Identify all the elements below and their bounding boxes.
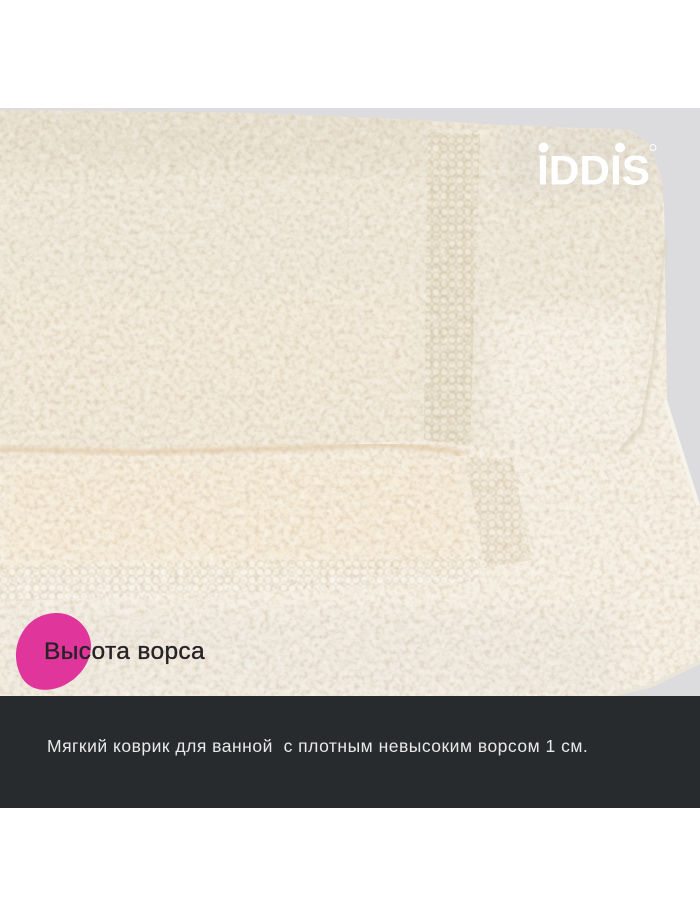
mat edge shadow (0, 445, 462, 455)
lower mat layer (0, 190, 700, 700)
upper rolled mat layer (0, 100, 700, 455)
photo background (0, 108, 700, 696)
photo: folded cream bath mat (0, 108, 700, 696)
decorative pink blob (16, 613, 91, 690)
description text: Мягкий коврик для ванной с плотным невысоким ворсом 1 см. (47, 736, 588, 756)
mat shadow under roll edge (618, 240, 664, 452)
heading: Высота ворса (44, 638, 205, 665)
logo: iDDiS: IDDIS (537, 146, 650, 194)
dark description band (0, 696, 700, 808)
